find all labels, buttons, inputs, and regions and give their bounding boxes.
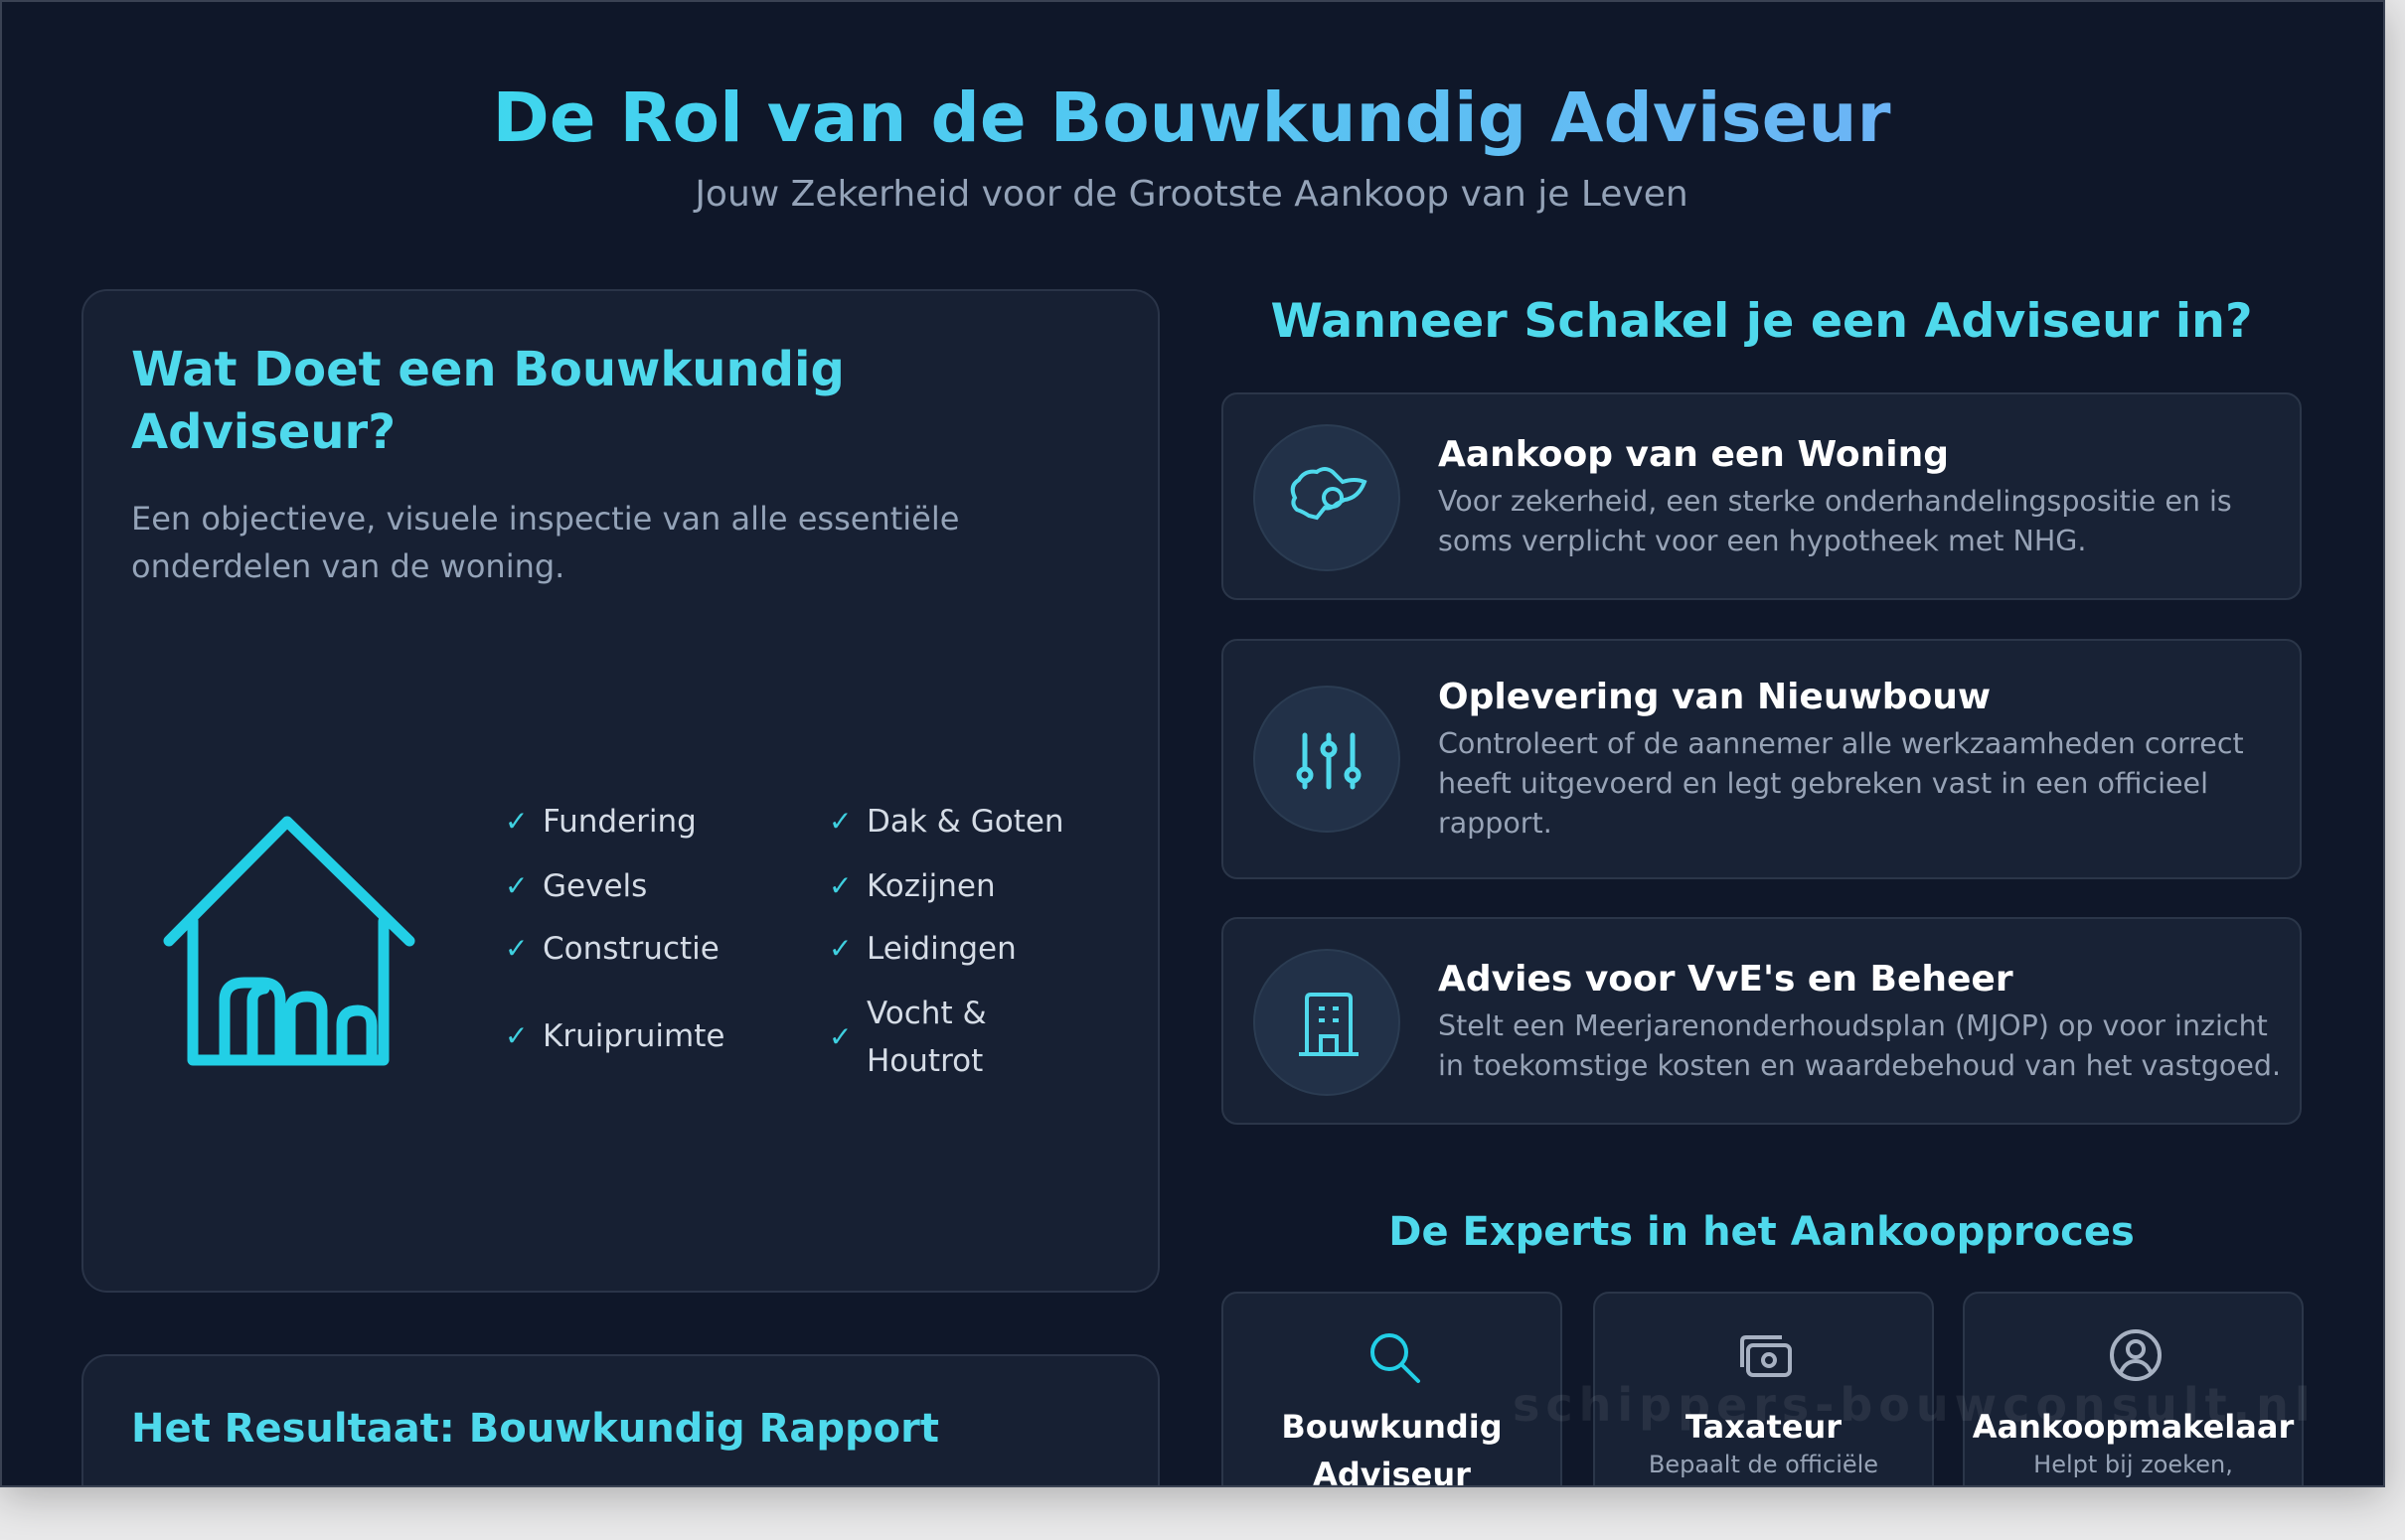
expert card: taxateur [1593, 1292, 1934, 1530]
card text: Stelt een Meerjarenonderhoudsplan (MJOP) op voor inzicht in toekomstige kosten en waardebehoud van het vastgoed. [1438, 1009, 2281, 1082]
checklist: Vocht & [867, 996, 987, 1031]
checklist: Houtrot [867, 1043, 983, 1079]
icon: building [1253, 949, 1400, 1096]
watermark: schippers-bouwconsult.nl [1513, 1378, 2317, 1432]
heading: resultaat: Het Resultaat: Bouwkundig Rapport [131, 1406, 939, 1452]
checklist: ✓ [505, 932, 528, 965]
checklist: Dak & Goten [867, 804, 1064, 840]
card text: Controleert of de aannemer alle werkzaamheden correct heeft uitgevoerd en legt gebreken vast in een officieel rapport. [1438, 727, 2244, 840]
panel: wat doet een bouwkundig adviseur [81, 289, 1160, 1293]
expert title: Bouwkundig [1281, 1408, 1503, 1446]
card title: Aankoop van een Woning [1438, 434, 1949, 475]
panel: resultaat [81, 1354, 1160, 1540]
title: De Rol van de Bouwkundig Adviseur [492, 78, 1891, 158]
heading: wat doet [131, 342, 845, 460]
expert title: Aankoopmakelaar [1973, 1408, 2294, 1446]
expert title [1281, 1408, 1503, 1487]
expert text: Helpt bij zoeken, [2033, 1451, 2233, 1478]
heading: experts: De Experts in het Aankoopproces [1388, 1209, 2135, 1255]
checklist: Gevels [543, 868, 647, 904]
expert card: aankoopmakelaar [1963, 1292, 2304, 1530]
card title: Advies voor VvE's en Beheer [1438, 959, 2013, 1000]
text block: intro [131, 500, 959, 585]
icon: sliders [1253, 686, 1400, 833]
expert title: Taxateur [1685, 1408, 1842, 1446]
checklist: ✓ [829, 1020, 852, 1053]
checklist: ✓ [829, 932, 852, 965]
checklist: Leidingen [867, 931, 1017, 967]
heading: wanneer: Wanneer Schakel je een Adviseur in? [1270, 294, 2253, 349]
checklist: ✓ [505, 869, 528, 902]
checklist: Kozijnen [867, 868, 996, 904]
subtitle: Jouw Zekerheid voor de Grootste Aankoop van je Leven [695, 174, 1688, 215]
checklist: Constructie [543, 931, 720, 967]
icon: money [1740, 1335, 1792, 1377]
card text: Voor zekerheid, een sterke onderhandelingspositie en is soms verplicht voor een hypotheek met NHG. [1438, 485, 2232, 557]
heading: wat doet: Adviseur? [131, 404, 396, 460]
text block: intro: Een objectieve, visuele inspectie van alle essentiële [131, 500, 959, 538]
expert text: Bepaalt de officiële [1649, 1451, 1878, 1478]
card title: Oplevering van Nieuwbouw [1438, 677, 1991, 717]
checklist: Kruipruimte [543, 1018, 724, 1054]
card: oplevering [1221, 639, 2302, 879]
icon: search [1370, 1333, 1421, 1383]
card: aankoop [1221, 392, 2302, 600]
card: vve [1221, 917, 2302, 1125]
checklist: ✓ [829, 805, 852, 838]
expert card: bouwkundig adviseur [1221, 1292, 1562, 1530]
icon: house search [1253, 424, 1400, 571]
checklist [505, 804, 1064, 1079]
icon: user [2110, 1329, 2162, 1381]
checklist: ✓ [505, 805, 528, 838]
checklist: ✓ [829, 869, 852, 902]
text block: intro: onderdelen van de woning. [131, 547, 564, 585]
heading: wat doet: Wat Doet een Bouwkundig [131, 342, 845, 397]
icon: house [163, 817, 415, 1065]
checklist: Fundering [543, 804, 697, 840]
checklist: ✓ [505, 1019, 528, 1052]
